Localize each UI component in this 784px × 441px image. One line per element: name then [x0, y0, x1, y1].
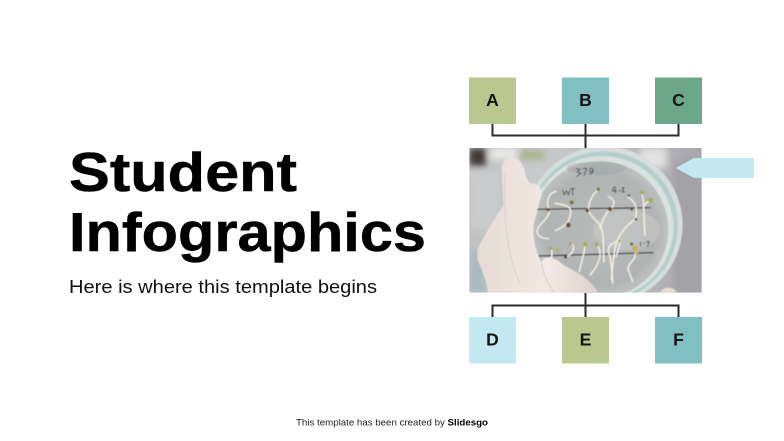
box D: D	[486, 330, 499, 350]
seeds	[547, 207, 637, 264]
black lines	[535, 208, 653, 256]
connector lines: bottom	[492, 293, 678, 317]
box E: E	[580, 330, 591, 350]
leaves	[549, 188, 653, 255]
title: Infographics	[69, 201, 426, 263]
box B	[562, 78, 609, 124]
title	[69, 141, 426, 263]
box A: A	[486, 90, 499, 110]
box F	[655, 317, 702, 364]
subtitle: Here is where this template begins	[69, 276, 377, 297]
footer credit: This template has been created by Slidesgo	[296, 418, 489, 428]
box C: C	[672, 90, 685, 110]
box C	[655, 78, 702, 124]
seedlings	[537, 190, 650, 283]
box A	[469, 78, 516, 124]
box D	[469, 317, 516, 364]
box E	[562, 317, 609, 364]
connector lines: top	[492, 124, 678, 148]
handwriting	[562, 168, 649, 247]
photo: petri dish with seedlings	[469, 146, 702, 304]
box B: B	[579, 90, 592, 110]
dish	[536, 148, 684, 293]
title: Student	[69, 141, 297, 203]
callout arrow	[676, 158, 754, 178]
box F: F	[673, 330, 684, 350]
glove hand	[477, 157, 677, 293]
